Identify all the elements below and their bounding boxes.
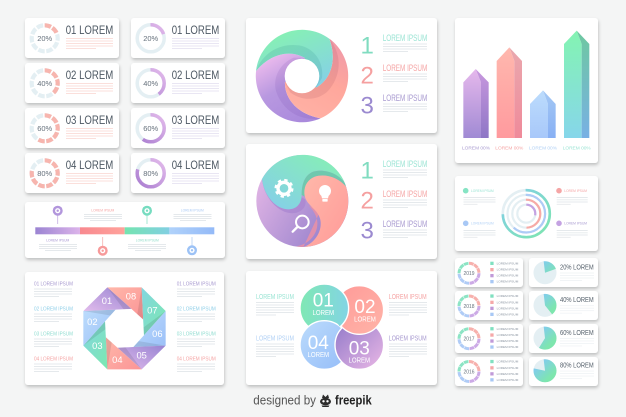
panel: solid ring card 01: 01 LOREM [172, 23, 219, 37]
octagon labels right [177, 282, 216, 372]
panel: solid ring card 03: 60% [143, 124, 159, 133]
timeline bar [35, 227, 214, 234]
swirl list: LOREM IPSUM [383, 63, 427, 73]
panel: year card 2016 [455, 357, 523, 386]
timeline label blue [174, 208, 212, 220]
lobes list: LOREM IPSUM [383, 219, 427, 229]
panel: three lobes [246, 144, 437, 259]
three lobe circle [256, 155, 348, 247]
interlocked circles: LOREM [354, 315, 376, 324]
footer: designed by freepik [253, 392, 372, 408]
octagon chart: 04 [112, 355, 123, 365]
interlocked circles: LOREM [307, 350, 329, 359]
panel: solid ring card 04: 04 LOREM [172, 158, 219, 172]
octagon labels right: 02 LOREM IPSUM [177, 306, 216, 312]
lobes list: 2 [360, 188, 374, 214]
panel: solid ring card 04 [131, 153, 225, 193]
pin: blue [187, 237, 197, 255]
swirl list: 3 [360, 92, 374, 120]
panel: four circles [246, 271, 437, 385]
panel: pie card 20%: 20% LOREM [560, 262, 594, 271]
panel: year card 2019: LOREM IPSUM [497, 268, 519, 272]
panel: solid ring card 04: 80% [143, 169, 159, 178]
panel: bar chart [455, 18, 598, 163]
pin: purple [53, 206, 63, 224]
timeline label teal [128, 238, 166, 250]
panel: solid ring card 02: 40% [143, 79, 159, 88]
panel: segmented ring card 03 [25, 108, 119, 148]
panel: year card 2018: LOREM IPSUM [497, 300, 519, 304]
panel: solid ring card 02: 02 LOREM [172, 68, 219, 82]
icon: freepik logo [320, 394, 331, 407]
interlocked circles: 01 [313, 290, 334, 312]
lobes list: 1 [360, 158, 374, 184]
panel: solid ring card 01: 20% [143, 34, 159, 43]
panel: year card 2017: LOREM IPSUM [497, 345, 519, 349]
panel: pie card 60% [529, 324, 598, 353]
panel: year card 2018: LOREM IPSUM [497, 312, 519, 316]
interlocked circles: LOREM [312, 308, 334, 317]
interlocked circles [300, 284, 384, 369]
panel: segmented ring card 03: 03 LOREM [66, 113, 113, 127]
octagon chart: 07 [147, 306, 158, 316]
panel: segmented ring card 04: 04 LOREM [66, 158, 113, 172]
panel: year card 2016: LOREM IPSUM [497, 366, 519, 370]
radial legend: LOREM IPSUM [471, 189, 494, 193]
circle labels left: LOREM IPSUM [256, 334, 294, 342]
circle labels left: LOREM IPSUM [256, 292, 294, 301]
swirl list: LOREM IPSUM [383, 33, 427, 43]
icon: light bulb [319, 185, 331, 202]
panel: year card 2017: LOREM IPSUM [497, 327, 519, 331]
octagon chart: 05 [136, 351, 147, 361]
panel: segmented ring card 01 [25, 18, 119, 58]
panel: solid ring card 01 [131, 18, 225, 58]
panel: year card 2018: LOREM IPSUM [497, 294, 519, 298]
panel: timeline [25, 202, 225, 258]
octagon labels left: 03 LOREM IPSUM [34, 332, 73, 338]
timeline label pink [84, 208, 122, 220]
panel: year card 2018 [455, 291, 523, 320]
timeline label blue: LOREM IPSUM [181, 208, 204, 212]
octagon chart: 03 [92, 341, 103, 351]
panel: octagon [25, 272, 224, 385]
interlocked circles: 03 [349, 338, 370, 360]
panel: segmented ring card 02 [25, 63, 119, 103]
octagon labels left: 04 LOREM IPSUM [34, 356, 73, 362]
panel: year card 2019: LOREM IPSUM [497, 280, 519, 284]
radial legend [463, 188, 588, 237]
interlocked circles: 04 [308, 333, 329, 354]
timeline label purple [39, 238, 77, 250]
panel: year card 2018: 2018 [464, 304, 475, 310]
panel: pie card 80% [529, 357, 598, 386]
swirl list: LOREM IPSUM [383, 93, 427, 103]
circle labels right: LOREM IPSUM [389, 292, 427, 301]
octagon labels left: 02 LOREM IPSUM [34, 306, 73, 312]
panel: year card 2017 [455, 324, 523, 353]
swirl list: 1 [360, 32, 374, 60]
icon: gear [276, 180, 292, 197]
panel: year card 2017: 2017 [464, 337, 475, 343]
lobes list [360, 158, 427, 244]
lobes list: LOREM IPSUM [383, 189, 427, 199]
interlocked circles: LOREM [348, 356, 370, 365]
circle labels right: LOREM IPSUM [389, 334, 427, 342]
bar labels: LOREM 00% [529, 146, 558, 152]
icon: magnifier [293, 216, 309, 232]
radial legend: LOREM IPSUM [564, 189, 587, 193]
bar labels [462, 146, 591, 152]
panel: pie card 60%: 60% LOREM [560, 328, 594, 337]
circle labels right [389, 292, 427, 356]
panel: year card 2017: LOREM IPSUM [497, 339, 519, 343]
panel: solid ring card 03: 03 LOREM [172, 113, 219, 127]
panel: pie card 40%: 40% LOREM [560, 295, 594, 304]
panel: year card 2019: LOREM IPSUM [497, 261, 519, 265]
octagon labels left [34, 282, 73, 372]
octagon labels right: 04 LOREM IPSUM [177, 356, 216, 362]
panel: solid ring card 03 [131, 108, 225, 148]
panel: segmented ring card 04: 80% [37, 169, 53, 178]
panel: solid ring card 02 [131, 63, 225, 103]
panel: year card 2019 [455, 258, 523, 287]
swirl donut chart [247, 30, 365, 139]
bar labels: LOREM 00% [462, 146, 491, 152]
panel: segmented ring card 01: 01 LOREM [66, 23, 113, 37]
octagon labels right: 03 LOREM IPSUM [177, 332, 216, 338]
timeline label purple: LOREM IPSUM [46, 238, 69, 242]
swirl list [360, 32, 427, 120]
panel: pie card 40% [529, 291, 598, 320]
octagon chart: 08 [126, 291, 136, 301]
panel: pie card 20% [529, 258, 598, 287]
panel: swirl [246, 18, 437, 139]
radial legend: LOREM IPSUM [471, 222, 494, 226]
panel: segmented ring card 03: 60% [37, 124, 53, 133]
timeline label teal: LOREM IPSUM [136, 238, 159, 242]
footer: designed by freepik: designed by [253, 394, 317, 408]
timeline label pink: LOREM IPSUM [91, 208, 114, 212]
octagon chart [83, 287, 166, 369]
panel: year card 2016: LOREM IPSUM [497, 372, 519, 376]
panel: segmented ring card 04 [25, 153, 119, 193]
octagon labels right: 01 LOREM IPSUM [177, 282, 216, 288]
circle labels left [256, 292, 294, 356]
panel: year card 2017: LOREM IPSUM [497, 333, 519, 337]
panel: segmented ring card 01: 20% [37, 34, 53, 43]
bar labels: LOREM 00% [563, 146, 591, 152]
panel: year card 2019: 2019 [464, 271, 475, 277]
octagon labels left: 01 LOREM IPSUM [34, 282, 73, 288]
octagon chart: 06 [152, 329, 163, 339]
panel: year card 2016: 2016 [464, 369, 475, 375]
panel: radial chart [455, 176, 598, 251]
panel: pie card 80%: 80% LOREM [560, 360, 594, 370]
panel: year card 2016: LOREM IPSUM [497, 360, 519, 364]
lobes list: 3 [360, 218, 374, 244]
panel: year card 2019: LOREM IPSUM [497, 274, 519, 278]
panel: year card 2018: LOREM IPSUM [497, 306, 519, 310]
pin: green [142, 206, 152, 224]
panel: year card 2016: LOREM IPSUM [497, 378, 519, 382]
footer: designed by freepik: freepik [335, 392, 372, 408]
panel: segmented ring card 02: 02 LOREM [66, 68, 113, 82]
arrow bars [463, 31, 589, 138]
bar labels: LOREM 00% [495, 146, 524, 152]
radial legend: LOREM IPSUM [564, 222, 587, 226]
octagon chart: 02 [87, 317, 98, 327]
concentric rings [503, 190, 550, 237]
octagon chart: 01 [102, 296, 112, 306]
swirl list: 2 [360, 62, 374, 90]
pin: pink [98, 237, 108, 256]
lobes list: LOREM IPSUM [383, 159, 427, 169]
interlocked circles: 02 [354, 297, 376, 318]
panel: segmented ring card 02: 40% [37, 79, 53, 88]
